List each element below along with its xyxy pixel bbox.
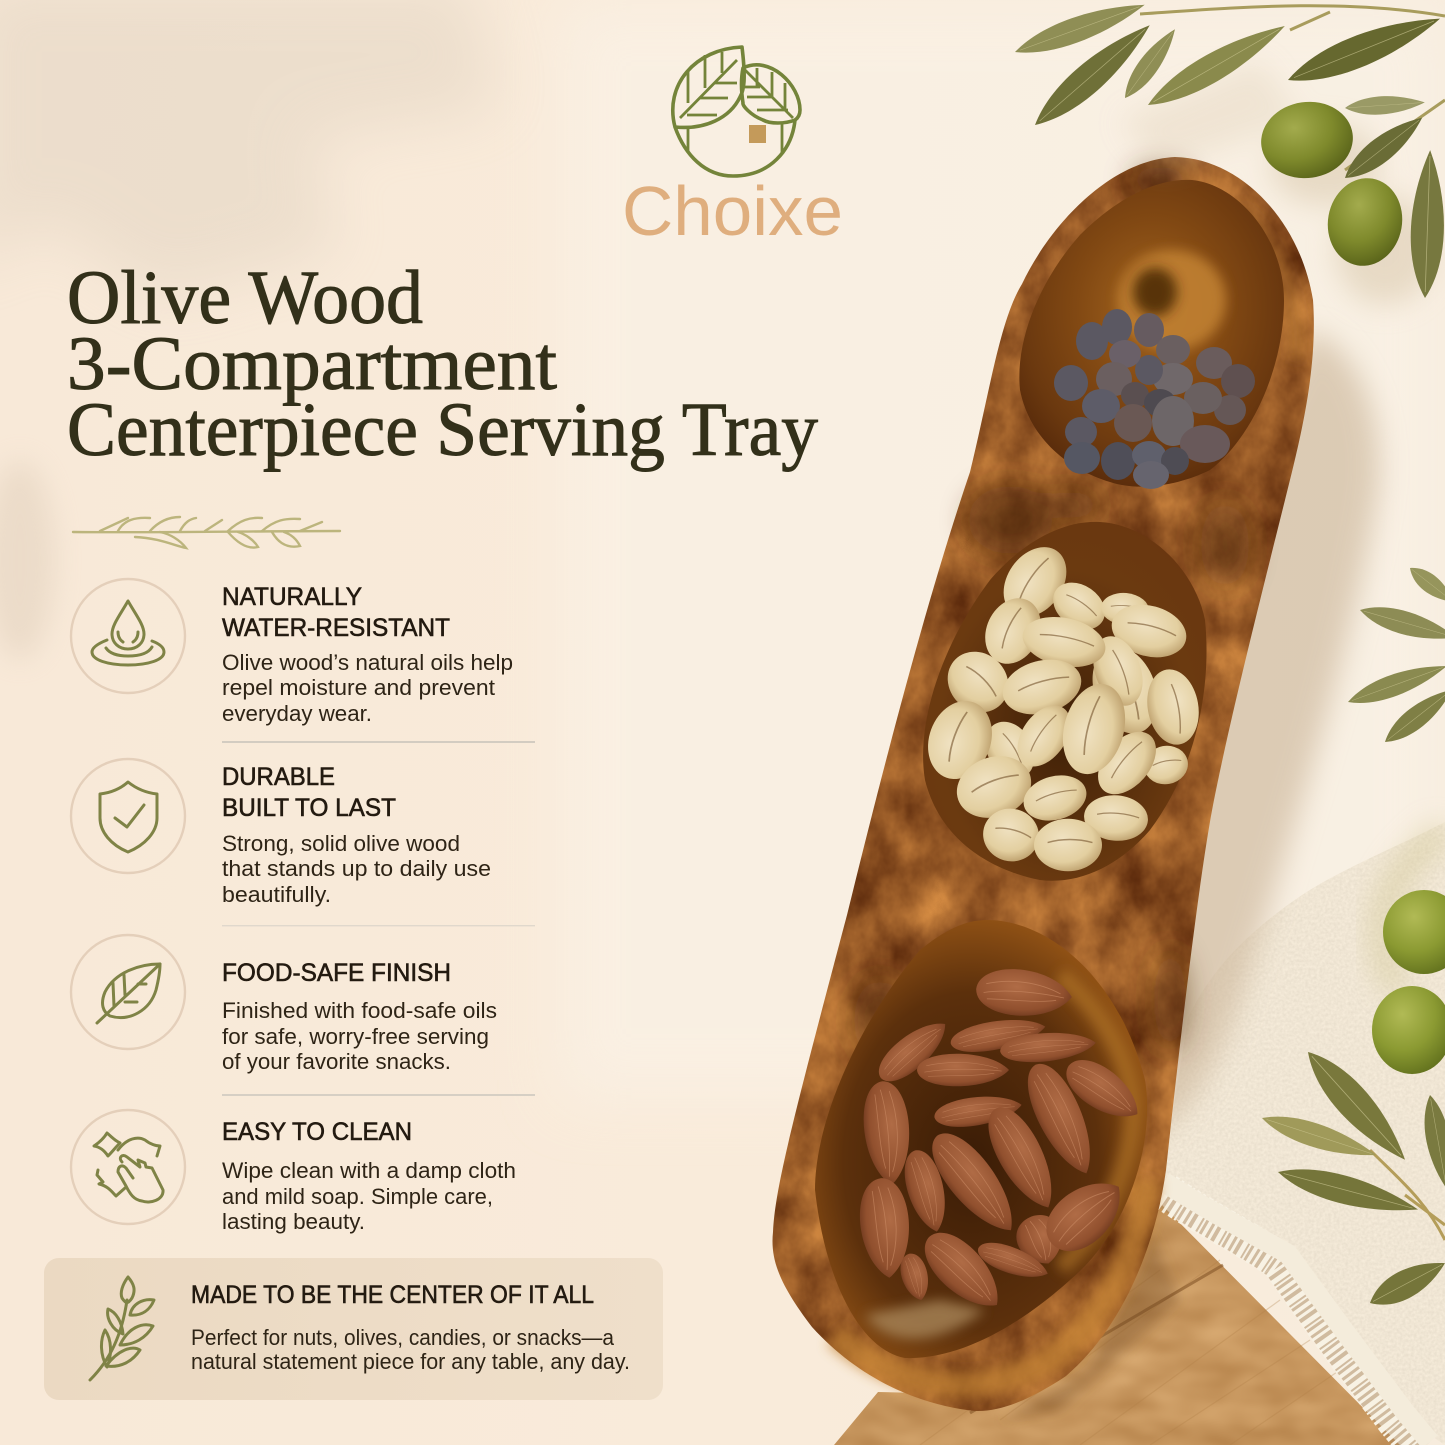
description [222,1158,516,1234]
description: natural statement piece for any table, any day. [191,1349,630,1374]
panel: made to be the center of it all [44,1258,663,1400]
description [222,831,491,907]
tray shadow [1140,330,1379,1140]
logo wordmark: Choixe [622,172,843,250]
feature: easy to clean [71,1110,516,1234]
icon: sprig [90,1277,154,1380]
description: and mild soap. Simple care, [222,1184,493,1209]
olive branch: bottom right [1258,1041,1445,1315]
heading: MADE TO BE THE CENTER OF IT ALL [191,1281,594,1309]
compartment: top with chocolate chips [1019,180,1284,489]
olive wood tray [772,157,1314,1411]
heading: EASY TO CLEAN [222,1118,412,1146]
wood figure: dark and light patches [835,166,1296,1384]
olives: on cloth [1372,890,1445,1074]
description: of your favorite snacks. [222,1049,451,1074]
description [222,650,513,726]
feature: food-safe finish [71,935,497,1074]
description: everyday wear. [222,701,372,726]
description: repel moisture and prevent [222,675,495,700]
cloth napkin [1162,822,1445,1445]
heading [222,583,450,642]
olive leaves: right middle [1344,561,1445,750]
logo mark: window [749,125,766,143]
heading: BUILT TO LAST [222,794,396,822]
description: Olive wood’s natural oils help [222,650,513,675]
feature: durable [71,759,491,907]
title: 3-Compartment [67,322,557,406]
compartment: middle with pistachios [917,522,1207,881]
icon: water drop [71,579,185,693]
description [222,998,497,1074]
heading: DURABLE [222,763,335,791]
compartment: bottom with almonds [815,920,1149,1358]
description: that stands up to daily use [222,856,491,881]
description: lasting beauty. [222,1209,365,1234]
icon: leaf [71,935,185,1049]
wooden floor [834,1205,1400,1445]
description: Perfect for nuts, olives, candies, or snacks—a [191,1325,615,1350]
description: Finished with food-safe oils [222,998,497,1023]
title [67,256,818,472]
icon: shield [71,759,185,873]
logo mark: leaves and house [673,47,800,176]
description: beautifully. [222,882,331,907]
olive branch: top right [1011,0,1445,305]
title: Centerpiece Serving Tray [67,388,818,472]
heading: NATURALLY [222,583,362,611]
description: Wipe clean with a damp cloth [222,1158,516,1183]
description: for safe, worry-free serving [222,1024,489,1049]
description: Strong, solid olive wood [222,831,460,856]
feature: naturally water-resistant [71,579,513,726]
description [191,1325,630,1374]
logo [622,47,843,250]
decorative sprig divider [73,517,340,548]
heading [222,763,396,822]
heading: FOOD-SAFE FINISH [222,959,451,987]
title: Olive Wood [67,256,423,340]
icon: wiping hand [71,1110,185,1224]
heading: WATER-RESISTANT [222,614,450,642]
